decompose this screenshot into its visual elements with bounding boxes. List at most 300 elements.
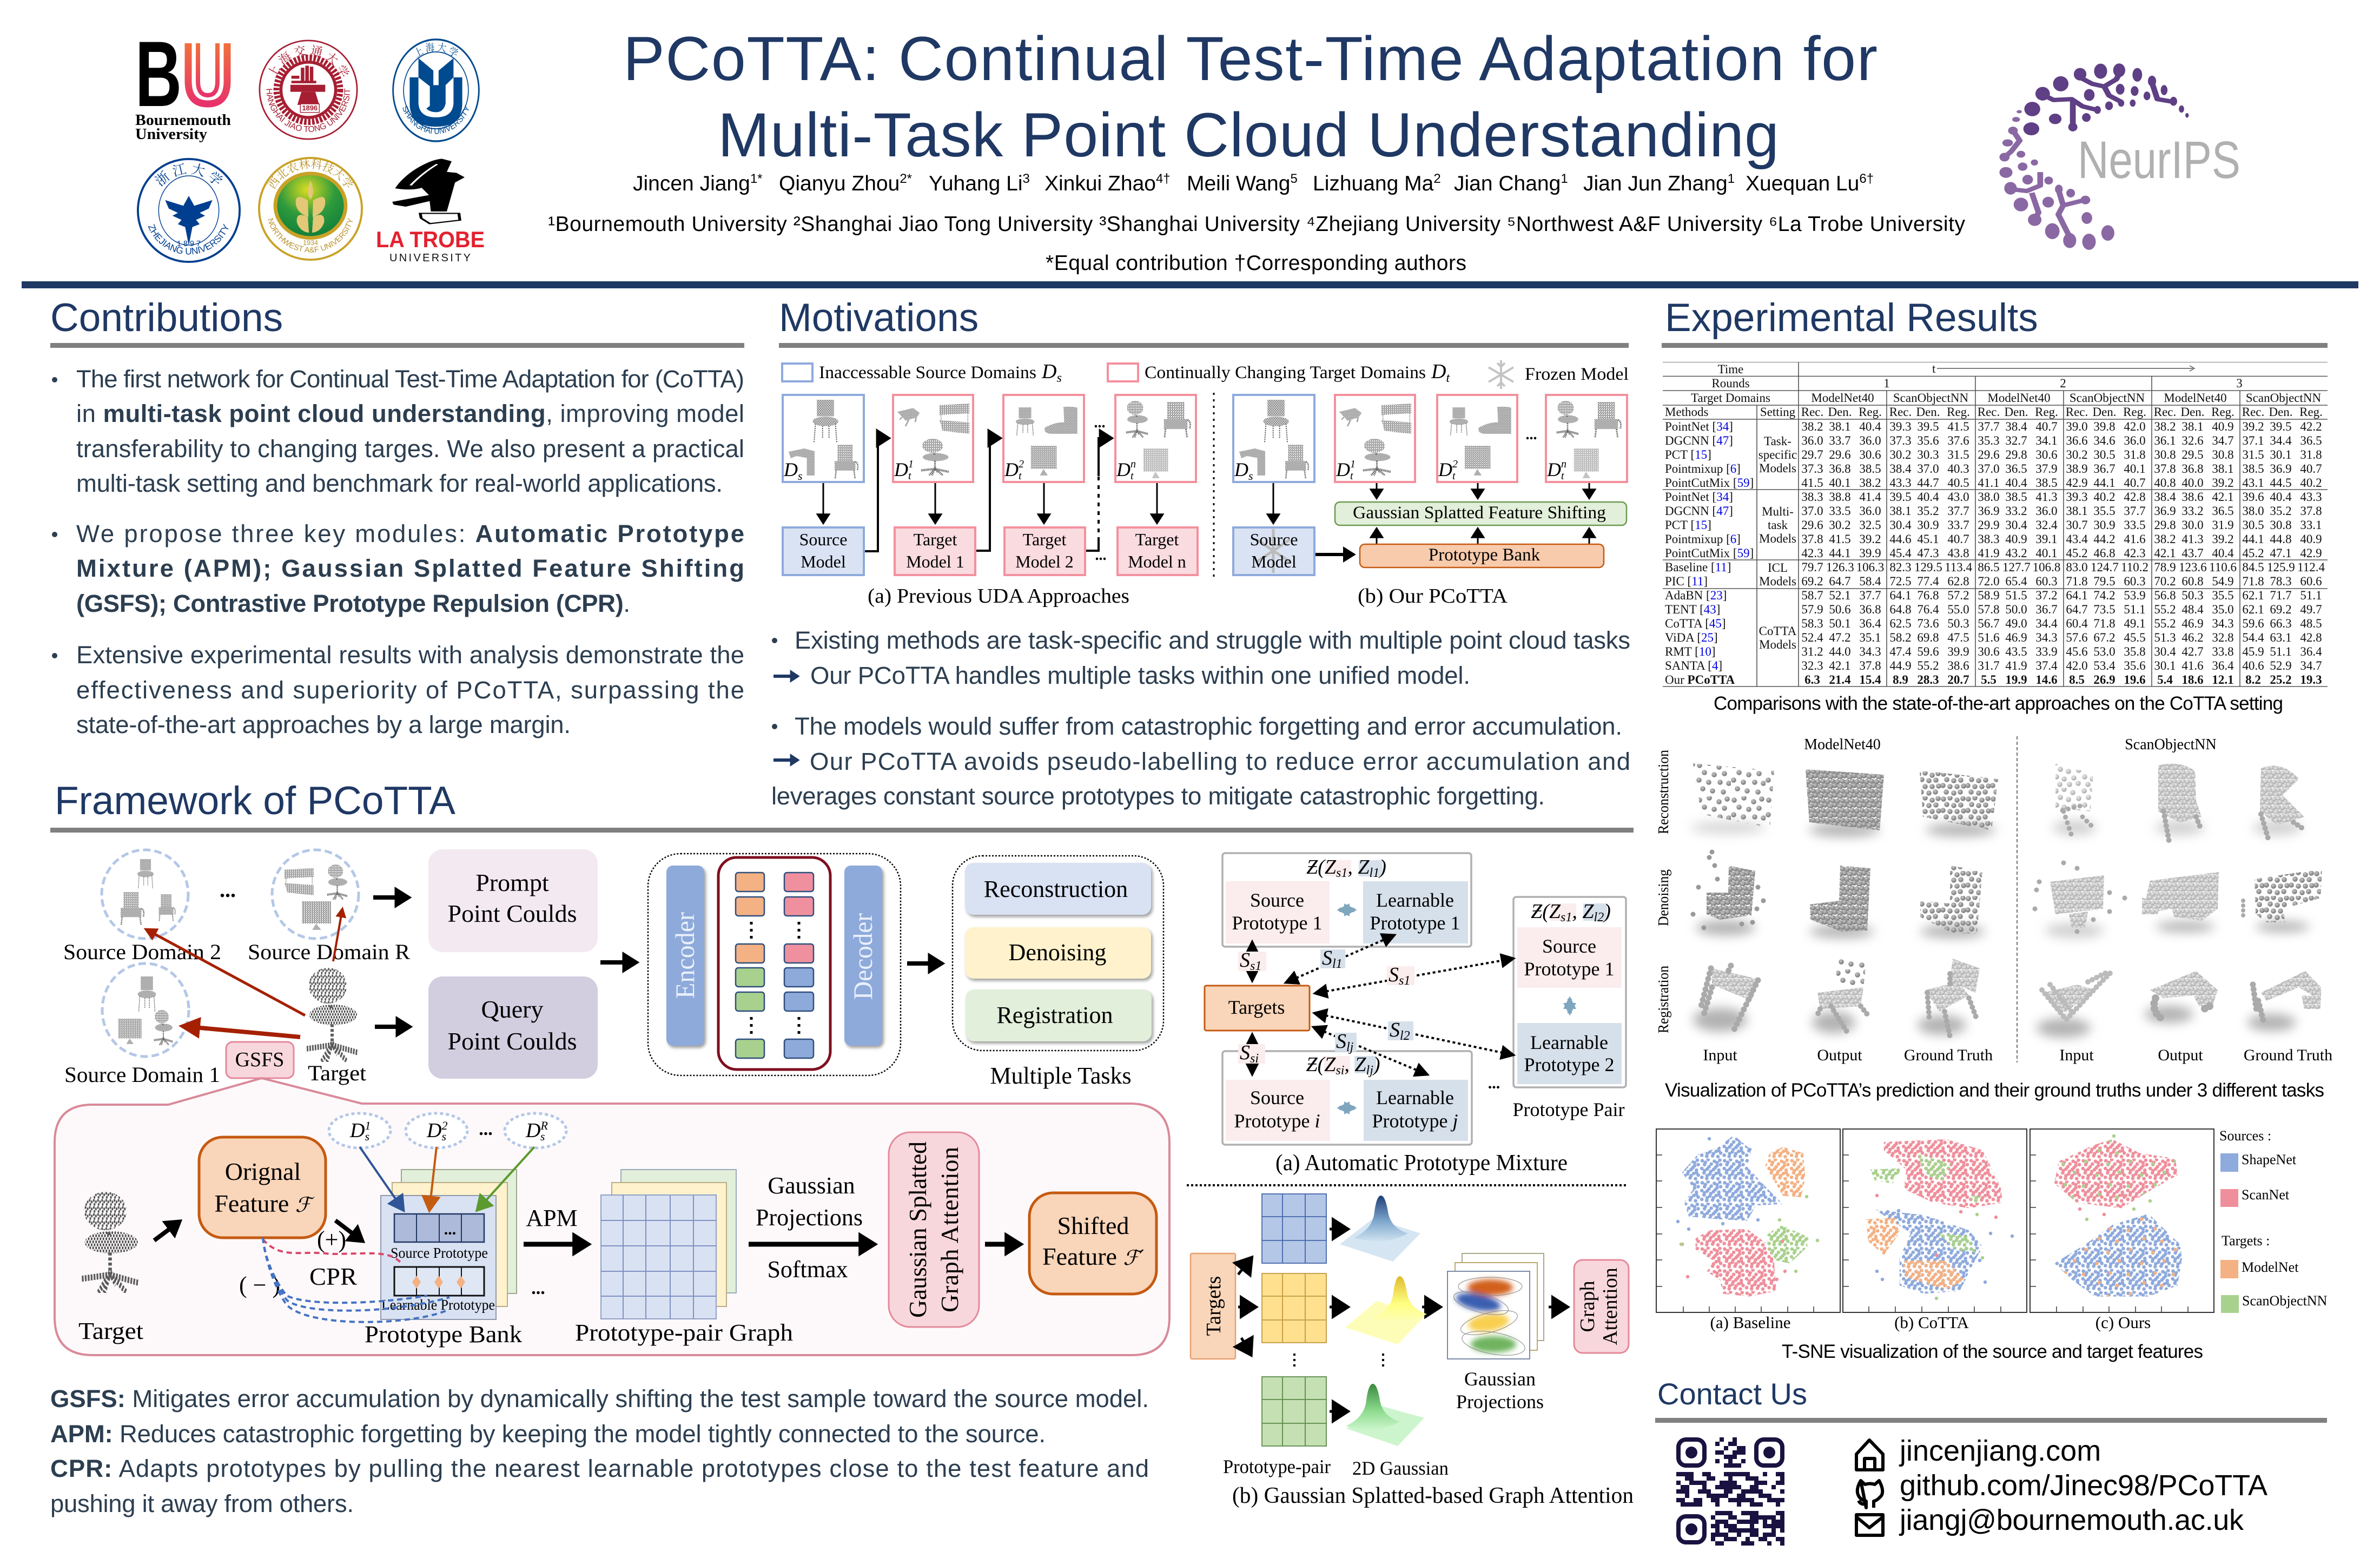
diagram: previous UDA approaches: Target — [1023, 530, 1066, 549]
plot legend: ScanObjectNN — [2242, 1293, 2328, 1309]
diagram: automatic prototype mixture: Prototype 2 — [1524, 1054, 1614, 1075]
comparison results table: 58.2 — [1889, 631, 1912, 644]
logo: Shanghai University: 上 海 大 学 — [416, 42, 458, 58]
comparison results table: 31.8 — [2124, 448, 2146, 461]
diagram: automatic prototype mixture: (a) Automatic Prototype Mixture — [1275, 1151, 1568, 1176]
comparison results table: 42.9 — [2066, 476, 2088, 489]
diagram: automatic prototype mixture: , Z — [1347, 856, 1370, 879]
diagram: our PCoTTA: ... — [1525, 426, 1537, 443]
comparison results table: 41.4 — [1859, 490, 1881, 503]
comparison results table: Rec. — [2066, 405, 2088, 419]
box: graph attention: Attention — [1599, 1267, 1622, 1345]
comparison results table: AdaBN [23] — [1665, 589, 1727, 602]
diagram: our PCoTTA: 1 — [1350, 458, 1356, 470]
comparison results table: 41.6 — [2124, 532, 2146, 545]
comparison results table: 50.0 — [2005, 603, 2027, 616]
diagram: our PCoTTA: t — [1452, 470, 1456, 482]
comparison results table: 40.4 — [2270, 490, 2292, 503]
bullet 3 text: state-of-the-art approaches by a large margin. — [76, 711, 571, 738]
comparison results table: 40.4 — [1859, 420, 1881, 433]
comparison results table: Rec. — [1801, 405, 1823, 419]
authors: Jincen Jiang — [633, 172, 750, 195]
comparison results table: 26.9 — [2093, 673, 2115, 686]
comparison results table: 36.9 — [1978, 504, 2000, 517]
source domains and target: ... — [220, 877, 236, 902]
comparison results table: 38.2 — [1859, 476, 1881, 489]
diagram: our PCoTTA: Source — [1250, 530, 1298, 549]
diagram: previous UDA approaches: ... — [1094, 414, 1106, 431]
comparison results table: 52.1 — [1829, 589, 1851, 602]
bullet 1 text: transferability to changing targes. We also present a practical — [76, 435, 744, 463]
prototype-pair graph: Prototype-pair Graph — [575, 1319, 793, 1346]
comparison results table: 124.7 — [2091, 560, 2119, 574]
comparison results table: PointNet [34] — [1665, 420, 1733, 433]
plot legend: ShapeNet — [2242, 1152, 2297, 1167]
comparison results table: PointCutMix [59] — [1665, 476, 1754, 489]
logos: partner universities — [135, 22, 485, 264]
panel: experimental results heading: Experimental Results — [1665, 296, 2038, 340]
diagram: our PCoTTA: D — [1547, 459, 1561, 480]
comparison results table: 43.2 — [2005, 546, 2027, 559]
comparison results table: Rounds — [1711, 377, 1750, 390]
comparison results table: 29.5 — [2181, 448, 2204, 461]
legend: Continually Changing Target Domains — [1145, 363, 1426, 382]
comparison results table: 39.3 — [1889, 420, 1912, 433]
comparison results table: 38.5 — [2005, 490, 2027, 503]
comparison results table: 31.9 — [2212, 518, 2234, 531]
box: gaussian splatted graph attention — [889, 1132, 979, 1327]
panel: motivations — [771, 296, 1630, 810]
diagram: automatic prototype mixture: , Z — [1572, 900, 1594, 923]
row labels: Denoising — [1655, 869, 1671, 926]
comparison results table: 43.3 — [2300, 490, 2322, 503]
icon: mail — [1856, 1515, 1883, 1535]
comparison results table: 33.2 — [2005, 504, 2027, 517]
comparison results table: 5.5 — [1981, 673, 1996, 686]
logo: La Trobe University: LA TROBE — [376, 227, 485, 252]
comparison results table: 78.9 — [2154, 560, 2176, 574]
comparison results table: 39.2 — [2212, 532, 2234, 545]
comparison results table: Reg. — [2035, 405, 2058, 419]
comparison results table: ICL — [1768, 560, 1788, 575]
comparison results table: 47.1 — [2270, 546, 2292, 559]
row labels: Reconstruction — [1655, 750, 1671, 834]
comparison results table: 44.6 — [1889, 532, 1912, 545]
comparison results table: 125.9 — [2267, 560, 2295, 574]
bullet 3 text: Extensive experimental results with analysis demonstrate the — [76, 641, 744, 669]
comparison results table: 47.5 — [1947, 631, 1969, 644]
encoder-decoder block — [648, 854, 901, 1075]
diagram: automatic prototype mixture: Prototype 1 — [1524, 958, 1614, 980]
motivation text: The models would suffer from catastrophic forgetting and error accumulation. — [795, 712, 1622, 740]
logo: Shanghai Jiao Tong University: 上 海 交 通 大 学 — [268, 44, 349, 78]
domain bubbles: D — [427, 1119, 441, 1142]
comparison results table: 33.5 — [1829, 504, 1851, 517]
comparison results table: 36.7 — [2093, 462, 2115, 475]
logo: Northwest A&F University: 西北农林科技大学 — [267, 159, 354, 189]
comparison results table: 42.7 — [2181, 645, 2204, 658]
comparison results table: 35.2 — [2270, 504, 2292, 517]
comparison results table: 52.4 — [1801, 631, 1823, 644]
logo: La Trobe University: UNIVERSITY — [389, 252, 471, 264]
comparison results table: Rec. — [2154, 405, 2176, 419]
comparison results table: specific — [1758, 448, 1797, 461]
comparison results table: 48.5 — [2300, 617, 2322, 630]
comparison results table: 60.6 — [2300, 575, 2322, 588]
legend — [782, 360, 1629, 389]
logo: Shanghai Jiao Tong University: 1896 — [302, 104, 318, 112]
diagram: previous UDA approaches: (a) Previous UDA Approaches — [868, 585, 1129, 608]
comparison results table: 35.3 — [1978, 434, 2000, 447]
comparison results table: Our PCoTTA — [1665, 673, 1735, 686]
comparison results table: 31.7 — [1978, 659, 2000, 672]
multiple tasks — [953, 856, 1163, 1089]
comparison results table: 51.3 — [2154, 631, 2176, 644]
box: GSFS — [226, 1042, 294, 1078]
github link: github.com/Jinec98/PCoTTA — [1900, 1469, 2267, 1502]
comparison results table: 36.0 — [1801, 434, 1823, 447]
domain bubbles: R — [540, 1119, 548, 1132]
diagram: previous UDA approaches: Model 2 — [1015, 552, 1074, 571]
box: query point clouds — [428, 976, 598, 1079]
comparison results table: 69.2 — [2270, 603, 2292, 616]
logo: Bournemouth University — [135, 22, 231, 143]
box: query point clouds: Point Coulds — [447, 1027, 577, 1055]
diagram: previous UDA approaches: t — [908, 470, 911, 482]
comparison results table: 53.0 — [2093, 645, 2115, 658]
comparison results table: 37.0 — [1978, 462, 2000, 475]
comparison results table: 29.9 — [1978, 518, 2000, 531]
comparison results table: 40.4 — [1917, 490, 1939, 503]
heading: Framework of PCoTTA: Framework of PCoTTA — [55, 779, 455, 823]
comparison results table: CoTTA — [1759, 624, 1796, 638]
logo: Shanghai Jiao Tong University — [259, 40, 358, 140]
comparison results table: 41.9 — [2005, 659, 2027, 672]
comparison results table: 38.4 — [2154, 490, 2176, 503]
comparison results table: 36.0 — [1859, 434, 1881, 447]
comparison results table: 39.9 — [1859, 546, 1881, 559]
comparison results table: 30.6 — [1859, 448, 1881, 461]
comparison results table: 51.5 — [2005, 589, 2027, 602]
comparison results table: Den. — [2092, 405, 2117, 419]
comparison results table: 46.9 — [2181, 617, 2204, 630]
box: prompt point clouds: Prompt — [475, 869, 549, 896]
comparison results table: 30.3 — [1917, 448, 1939, 461]
comparison results table: 58.7 — [1801, 589, 1823, 602]
diagram: our PCoTTA: D — [1234, 459, 1248, 480]
comparison results table: 33.8 — [2212, 645, 2234, 658]
comparison results table: 55.0 — [1947, 603, 1969, 616]
comparison results table: 29.7 — [1801, 448, 1823, 461]
comparison results table: 29.6 — [1978, 448, 2000, 461]
comparison results table: 42.3 — [2124, 546, 2146, 559]
comparison results table: 64.7 — [2066, 603, 2088, 616]
column headers: ModelNet40 — [1804, 736, 1881, 753]
comparison results table: Methods — [1665, 405, 1708, 419]
comparison results table: 63.1 — [2270, 631, 2292, 644]
comparison results table: 38.0 — [2242, 504, 2264, 517]
comparison results table: 30.7 — [2066, 518, 2088, 531]
comparison results table: 42.1 — [2154, 546, 2176, 559]
column headers — [1804, 736, 2217, 753]
email link: jiangj@bournemouth.ac.uk — [1899, 1504, 2244, 1536]
comparison results table: 35.5 — [2093, 504, 2115, 517]
comparison results table: 36.8 — [1859, 603, 1881, 616]
legend: Frozen Model — [1525, 365, 1629, 384]
comparison results table: 30.2 — [1829, 518, 1851, 531]
diagram: automatic prototype mixture: s1 — [1399, 974, 1410, 988]
comparison results table: 60.3 — [2035, 575, 2058, 588]
comparison results table: 36.6 — [2066, 434, 2088, 447]
diagram: our PCoTTA: (b) Our PCoTTA — [1358, 585, 1508, 608]
comparison results table: 30.8 — [2270, 518, 2292, 531]
prototype bank: Learnable Prototype — [381, 1297, 495, 1313]
comparison results table: 53.4 — [2093, 659, 2115, 672]
comparison results table: 41.3 — [2181, 532, 2204, 545]
comparison results table: 21.4 — [1829, 673, 1851, 686]
diagram: our PCoTTA — [1233, 395, 1627, 608]
prototype bank — [365, 1170, 545, 1348]
comparison results table: 25.2 — [2270, 673, 2292, 686]
comparison results table: 1 — [1883, 377, 1890, 390]
comparison results table: ScanObjectNN — [2246, 391, 2321, 405]
authors: 4† — [1156, 171, 1171, 186]
comparison results table: 44.1 — [2242, 532, 2264, 545]
comparison results table: 41.1 — [1978, 476, 2000, 489]
panel: contact us — [1655, 1377, 2327, 1543]
comparison results table: 62.8 — [1947, 575, 1969, 588]
comparison results table: 49.7 — [2300, 603, 2322, 616]
comparison results table: Target Domains — [1691, 391, 1770, 405]
diagram: previous UDA approaches: t — [1130, 470, 1134, 482]
comparison results table: 18.6 — [2181, 673, 2204, 686]
comparison results table: 51.1 — [2300, 589, 2322, 602]
comparison results table: 37.1 — [2242, 434, 2264, 447]
comparison results table: Rec. — [1889, 405, 1912, 419]
diagram: previous UDA approaches: D — [894, 459, 908, 480]
comparison results table: 106.8 — [2033, 560, 2060, 574]
icon: home — [1856, 1440, 1883, 1470]
comparison results table: 35.0 — [2212, 603, 2234, 616]
bullet 2 text — [52, 520, 744, 617]
panel: contributions — [50, 296, 744, 738]
source domains and target: Source Domain 1 — [64, 1062, 220, 1087]
comparison results table: 34.3 — [2035, 631, 2058, 644]
diagram: automatic prototype mixture: s1 — [1336, 866, 1347, 880]
comparison results table: 35.6 — [2124, 659, 2146, 672]
comparison results table: 56.7 — [1978, 617, 2000, 630]
gaussian projections arrow: Projections — [756, 1204, 863, 1231]
comparison results table: 59.6 — [2242, 617, 2264, 630]
motivation text: Existing methods are task-specific and struggle with multiple point cloud tasks — [795, 626, 1630, 654]
comparison results table: 41.5 — [1947, 420, 1969, 433]
comparison results table: 38.5 — [2035, 476, 2058, 489]
comparison results table: 39.0 — [2066, 420, 2088, 433]
comparison results table: 49.1 — [2124, 617, 2146, 630]
comparison results table: 53.9 — [2124, 589, 2146, 602]
logo: Shanghai University — [392, 38, 480, 142]
diagram: automatic prototype mixture: Source — [1542, 935, 1596, 957]
comparison results table: 43.0 — [1947, 490, 1969, 503]
comparison results table: 123.6 — [2179, 560, 2207, 574]
comparison results table: 34.3 — [1859, 645, 1881, 658]
comparison results table: ModelNet40 — [2164, 391, 2227, 405]
legend: s — [1056, 371, 1062, 385]
comparison results table: 39.2 — [2242, 420, 2264, 433]
diagram: previous UDA approaches: 1 — [908, 458, 914, 470]
comparison results table: 66.3 — [2270, 617, 2292, 630]
comparison results table: 43.4 — [2066, 532, 2088, 545]
comparison results table: 35.2 — [1917, 504, 1939, 517]
box: targets — [1205, 986, 1310, 1031]
comparison results table: 37.9 — [2035, 462, 2058, 475]
comparison results table: 47.2 — [1829, 631, 1851, 644]
comparison results table: 47.4 — [1889, 645, 1912, 658]
comparison results table: 37.7 — [1947, 504, 1969, 517]
comparison results table: 37.8 — [1801, 532, 1823, 545]
comparison results table: 39.2 — [2212, 476, 2234, 489]
comparison results table: 5.4 — [2157, 673, 2173, 686]
comparison results table: 45.9 — [2242, 645, 2264, 658]
comparison results table: Reg. — [1947, 405, 1970, 419]
comparison results table: 58.3 — [1801, 617, 1823, 630]
comparison results table: 30.4 — [2005, 518, 2027, 531]
comparison results table: 41.6 — [2181, 659, 2204, 672]
logo: NeurIPS — [1999, 63, 2240, 250]
diagram: automatic prototype mixture: Prototype i — [1234, 1110, 1320, 1132]
comparison results table: 34.1 — [2035, 434, 2058, 447]
comparison results table: 56.8 — [2154, 589, 2176, 602]
diagram: our PCoTTA: t — [1350, 470, 1353, 482]
diagram: automatic prototype mixture: Learnable — [1376, 889, 1454, 911]
logo: Shanghai Jiao Tong University: SHANGHAI JIAO TONG UNIVERSITY — [266, 89, 351, 132]
comparison results table: 42.1 — [1829, 659, 1851, 672]
comparison results table: 19.9 — [2005, 673, 2027, 686]
comparison results table: 29.8 — [2005, 448, 2027, 461]
diagram: previous UDA approaches: Target — [914, 530, 957, 549]
logo: La Trobe University — [376, 159, 485, 264]
comparison results table: 62.5 — [1889, 617, 1912, 630]
comparison results table: 39.1 — [2035, 532, 2058, 545]
module descriptions: GSFS: Mitigates error accumulation by dynamically shifting the test sample toward the source model. — [50, 1385, 1149, 1412]
multiple tasks: Denoising — [1009, 939, 1106, 966]
comparison results table: Den. — [2180, 405, 2205, 419]
comparison results table: 46.2 — [2181, 631, 2204, 644]
comparison results table: 35.8 — [2124, 645, 2146, 658]
motivation text: leverages constant source prototypes to mitigate catastrophic forgetting. — [771, 782, 1545, 810]
comparison results table: 30.2 — [1889, 448, 1912, 461]
comparison results table: 37.7 — [2124, 504, 2146, 517]
comparison results table: 44.5 — [2270, 476, 2292, 489]
authors: 1* — [750, 171, 763, 186]
comparison results table: PIC [11] — [1665, 575, 1708, 588]
box: query point clouds: Query — [481, 995, 543, 1023]
comparison results table: Reg. — [2123, 405, 2146, 419]
diagram: automatic prototype mixture: S — [1240, 1041, 1250, 1064]
comparison results table: 31.2 — [1801, 645, 1823, 658]
comparison results table: t — [1932, 362, 1936, 375]
comparison results table: Setting — [1760, 405, 1795, 419]
comparison results table: PointCutMix [59] — [1665, 546, 1754, 559]
prototype-pair grids — [1262, 1194, 1326, 1446]
diagram: automatic prototype mixture: lj — [1346, 1040, 1354, 1054]
diagram: automatic prototype mixture: Prototype j — [1372, 1110, 1458, 1132]
comparison results table: 51.6 — [1978, 631, 2000, 644]
comparison results table: 30.1 — [2154, 659, 2176, 672]
comparison results table: 50.3 — [1947, 617, 1969, 630]
comparison results table: 6.3 — [1804, 673, 1820, 686]
comparison results table: 38.5 — [1859, 462, 1881, 475]
diagram: automatic prototype mixture: S — [1390, 1019, 1400, 1041]
column footers: Input — [2059, 1046, 2094, 1064]
diagram: our PCoTTA: 2 — [1452, 458, 1458, 470]
comparison results table: 40.9 — [2300, 532, 2322, 545]
comparison results table: 40.9 — [2212, 420, 2234, 433]
diagram: previous UDA approaches: s — [798, 469, 803, 483]
module descriptions: pushing it away from others. — [50, 1490, 354, 1517]
comparison results table: 39.9 — [1947, 645, 1969, 658]
column footers: Ground Truth — [2244, 1046, 2332, 1064]
comparison results table: 54.9 — [2212, 575, 2234, 588]
diagram: automatic prototype mixture: ... — [1488, 1074, 1500, 1092]
comparison results table: 14.6 — [2035, 673, 2058, 686]
gaussian projections arrow: Gaussian — [768, 1172, 855, 1199]
prototype-pair graph — [575, 1170, 793, 1346]
comparison results table: 37.3 — [1801, 462, 1823, 475]
diagram: previous UDA approaches: Source — [799, 530, 847, 549]
box: gaussian splatted graph attention: Gaussian Splatted — [904, 1141, 931, 1318]
comparison results table: 34.4 — [2270, 434, 2292, 447]
box: prompt point clouds: Point Coulds — [447, 900, 577, 927]
comparison results table: 69.8 — [1917, 631, 1939, 644]
title: PCoTTA: Continual Test-Time Adaptation for — [623, 24, 1877, 94]
motivation text — [771, 626, 1630, 810]
box: shifted feature: Shifted — [1057, 1212, 1129, 1239]
authors: Xuequan Lu — [1746, 172, 1859, 195]
comparison results table: Reg. — [1859, 405, 1882, 419]
comparison results table: 58.4 — [1859, 575, 1881, 588]
comparison results table: PCT [15] — [1665, 518, 1711, 531]
logo: Northwest A&F University: NORTHWEST A&F UNIVERSITY — [268, 217, 353, 253]
source domains and target: Source Domain R — [248, 940, 410, 964]
comparison results table: 40.1 — [1829, 476, 1851, 489]
diagram: automatic prototype mixture: l2 — [1594, 910, 1604, 925]
comparison results table: 36.0 — [1859, 504, 1881, 517]
authors: 3 — [1023, 171, 1030, 186]
prototype bank: Source Prototype — [391, 1245, 488, 1261]
comparison results table: 33.2 — [2181, 504, 2204, 517]
comparison results table: 32.5 — [1859, 518, 1881, 531]
APM arrow: APM — [526, 1205, 578, 1231]
comparison results table: 33.5 — [2124, 518, 2146, 531]
comparison results table: Pointmixup [6] — [1665, 462, 1741, 475]
plot legend — [2219, 1128, 2328, 1313]
comparison results table: Models — [1759, 638, 1796, 651]
comparison results table: 34.3 — [2212, 617, 2234, 630]
heading: Contributions: Contributions — [50, 296, 283, 340]
comparison results table: 38.1 — [1889, 504, 1912, 517]
comparison results table: 30.8 — [2212, 448, 2234, 461]
comparison results table: 44.9 — [1889, 659, 1912, 672]
comparison results table: 38.9 — [2066, 462, 2088, 475]
comparison results table: 47.3 — [1917, 546, 1939, 559]
diagram: gaussian splatted graph attention: (b) Gaussian Splatted-based Graph Attention — [1232, 1483, 1634, 1508]
comparison results table: 31.5 — [2242, 448, 2264, 461]
comparison results table: 64.1 — [1889, 589, 1912, 602]
plot: ours — [2030, 1129, 2214, 1312]
comparison results table: 42.3 — [1801, 546, 1823, 559]
comparison results table: 37.7 — [1859, 589, 1881, 602]
